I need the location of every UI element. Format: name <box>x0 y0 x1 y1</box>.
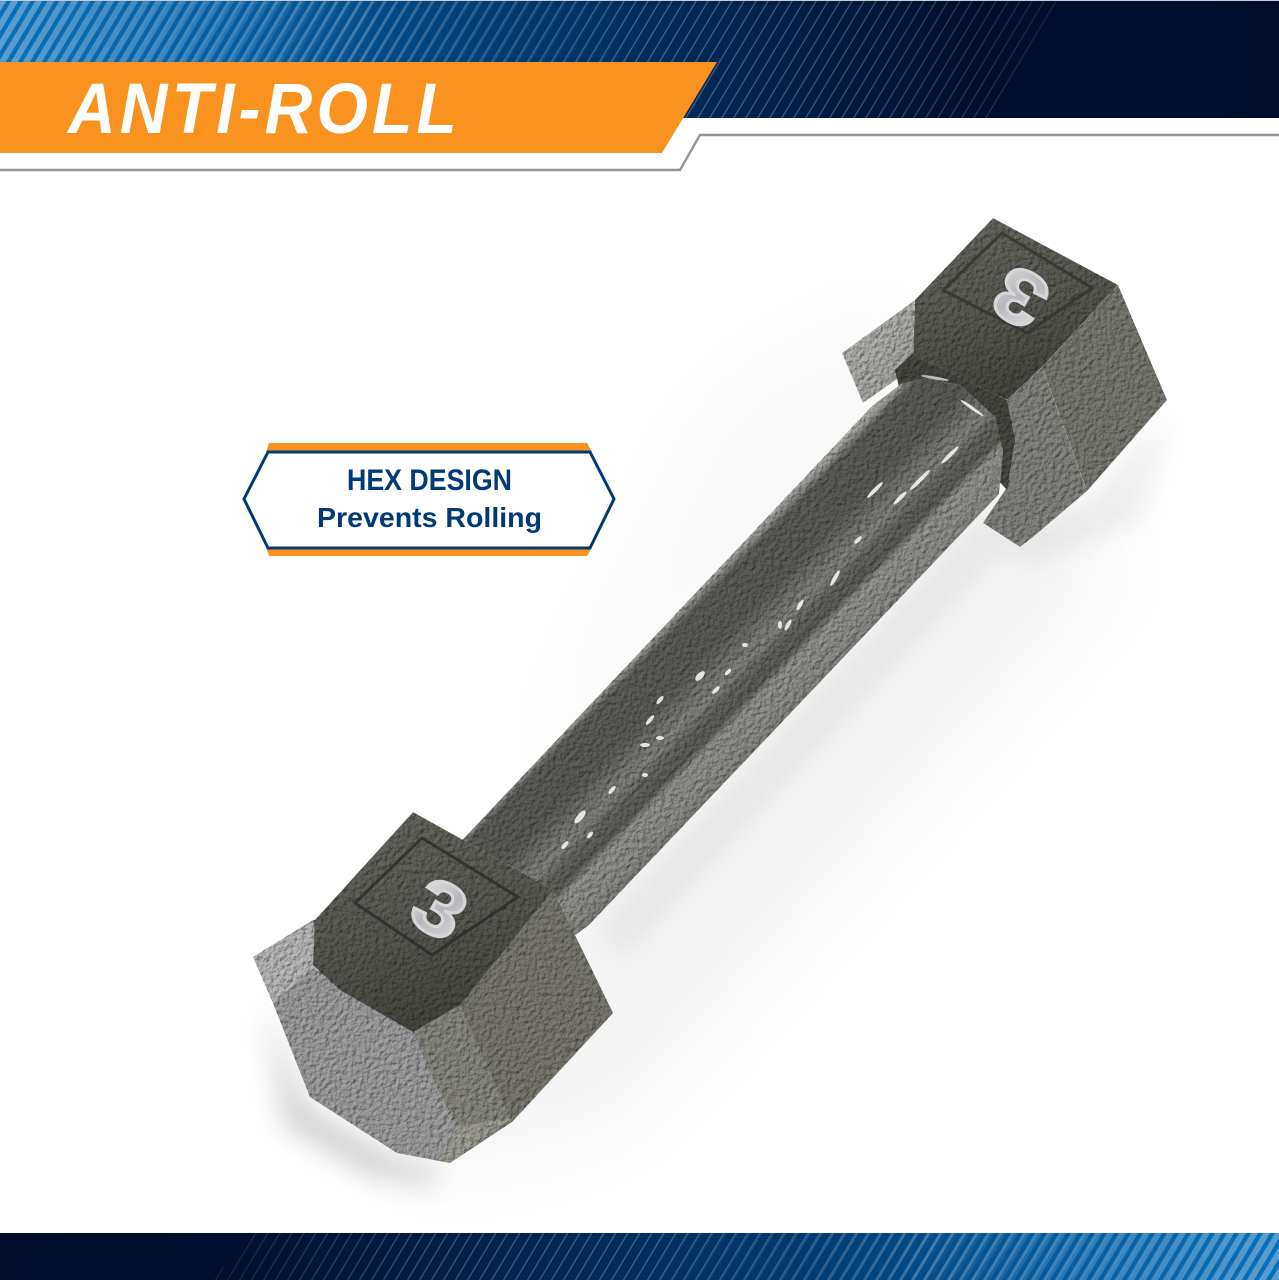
header outline stroke <box>0 135 1279 170</box>
neck of upper head <box>895 353 1015 490</box>
callout: hex design <box>244 443 614 556</box>
lower head recessed frame <box>355 838 518 955</box>
lower head bottom strip <box>437 1118 512 1163</box>
lower head silhouette base <box>253 890 613 1163</box>
dumbbell <box>253 218 1167 1163</box>
handle <box>450 378 1003 960</box>
soft floor shadow <box>265 300 1170 1185</box>
lower head narrow facet <box>413 1005 512 1127</box>
upper hex head rear faces <box>842 300 1087 547</box>
top header band <box>0 0 1279 118</box>
bottom footer band <box>0 1233 1279 1280</box>
lower hex head <box>253 812 613 1163</box>
lower head right face <box>460 890 613 1122</box>
upper head recessed frame <box>943 233 1092 333</box>
callout hexagon outline <box>244 452 614 548</box>
lower facet of upper head <box>983 367 1087 547</box>
title banner <box>0 62 717 153</box>
number 3 on upper head: 3 <box>979 248 1063 345</box>
upper hex head <box>913 218 1167 491</box>
callout orange top bar <box>266 443 592 452</box>
title: ANTI-ROLL <box>66 69 457 149</box>
upper head right face <box>1042 285 1167 491</box>
lower head end face <box>313 812 553 1032</box>
upper head end face <box>913 218 1118 400</box>
number 3 on lower head: 3 <box>397 861 481 958</box>
callout text line 2: Prevents Rolling <box>317 502 542 533</box>
lower head big light face <box>273 968 457 1160</box>
left side face of upper head <box>842 300 930 403</box>
callout orange bottom bar <box>266 547 592 556</box>
handle highlights <box>560 374 984 850</box>
lower head upper light facet <box>253 920 320 1008</box>
callout text line 1: HEX DESIGN <box>347 464 512 497</box>
